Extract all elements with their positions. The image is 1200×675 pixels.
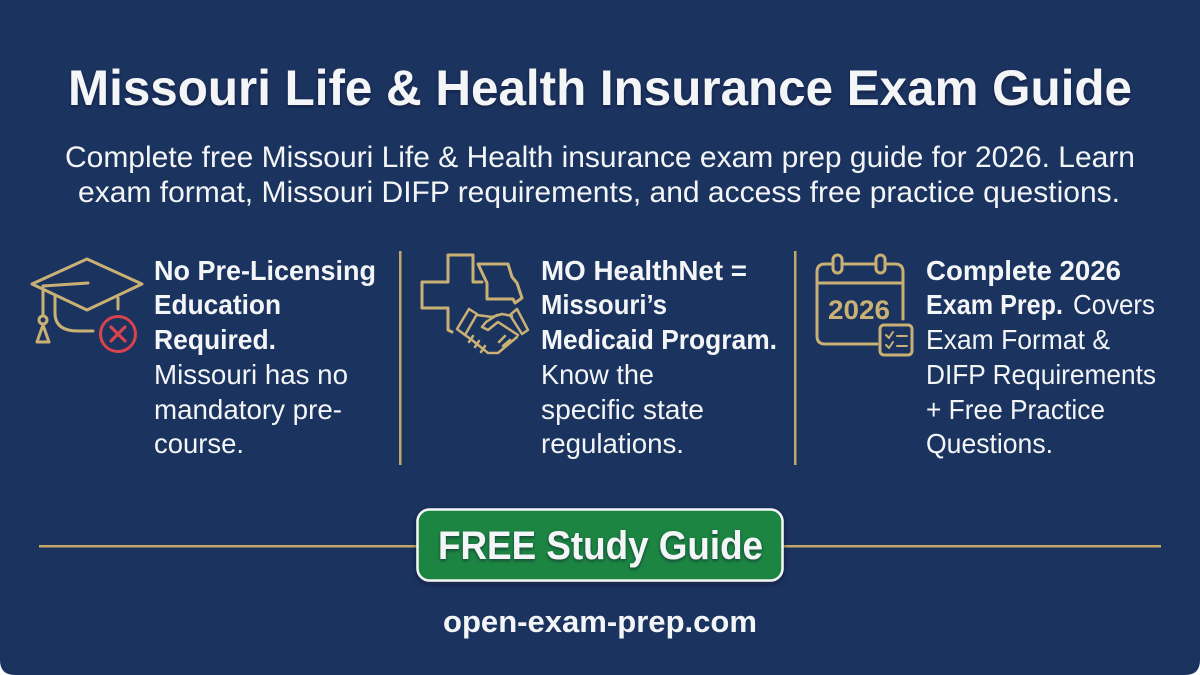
- title: Missouri Life & Health Insurance Exam Guide: [68, 60, 1132, 116]
- panel: MO HealthNet: [422, 255, 777, 459]
- text: complete 2026 exam prep: Questions.: [926, 428, 1053, 459]
- text: MO HealthNet: Missouri’s: [541, 289, 667, 320]
- call to action button: [418, 510, 782, 580]
- divider left: [399, 251, 402, 465]
- text: complete 2026 exam prep: Exam Prep.: [926, 289, 1063, 320]
- text: MO HealthNet: Know the: [541, 359, 654, 390]
- website url: open-exam-prep.com: [443, 604, 757, 639]
- text: no pre-licensing: mandatory pre-: [154, 394, 342, 425]
- subtitle: exam format, Missouri DIFP requirements, and access free practice questions.: [78, 176, 1120, 209]
- footer rule left: [39, 545, 417, 548]
- footer rule right: [783, 545, 1161, 548]
- text: no pre-licensing: [154, 255, 376, 459]
- call to action button: FREE Study Guide: [438, 524, 763, 568]
- text: complete 2026 exam prep: + Free Practice: [926, 394, 1105, 425]
- text: no pre-licensing: Missouri has no: [154, 359, 348, 390]
- divider right: [794, 251, 796, 465]
- text: MO HealthNet: MO HealthNet =: [541, 255, 747, 286]
- text: complete 2026 exam prep: Complete 2026: [926, 255, 1121, 286]
- text: no pre-licensing: course.: [154, 428, 244, 459]
- text: complete 2026 exam prep: Covers: [1073, 289, 1155, 320]
- icon: 2026 calendar with checklist: 2026: [828, 295, 890, 325]
- text: complete 2026 exam prep: DIFP Requirements: [926, 359, 1156, 390]
- panel: no pre-licensing education: [32, 255, 376, 459]
- text: no pre-licensing: No Pre-Licensing: [154, 255, 376, 286]
- text: complete 2026 exam prep: Exam Format &: [926, 324, 1110, 355]
- text: MO HealthNet: Medicaid Program.: [541, 324, 777, 355]
- text: MO HealthNet: specific state: [541, 394, 704, 425]
- panel: complete 2026 exam prep: [817, 255, 1156, 459]
- icon: medical cross, Missouri map and handshake: [422, 255, 528, 353]
- icon: graduation cap with red X: [32, 259, 142, 352]
- subtitle: [65, 141, 1135, 209]
- icon: 2026 calendar with checklist: [817, 255, 912, 355]
- text: MO HealthNet: regulations.: [541, 428, 684, 459]
- text: no pre-licensing: Education: [154, 289, 281, 320]
- subtitle: Complete free Missouri Life & Health insurance exam prep guide for 2026. Learn: [65, 141, 1135, 174]
- text: no pre-licensing: Required.: [154, 324, 276, 355]
- text: complete 2026 exam prep: [926, 255, 1156, 459]
- text: MO HealthNet: [541, 255, 777, 459]
